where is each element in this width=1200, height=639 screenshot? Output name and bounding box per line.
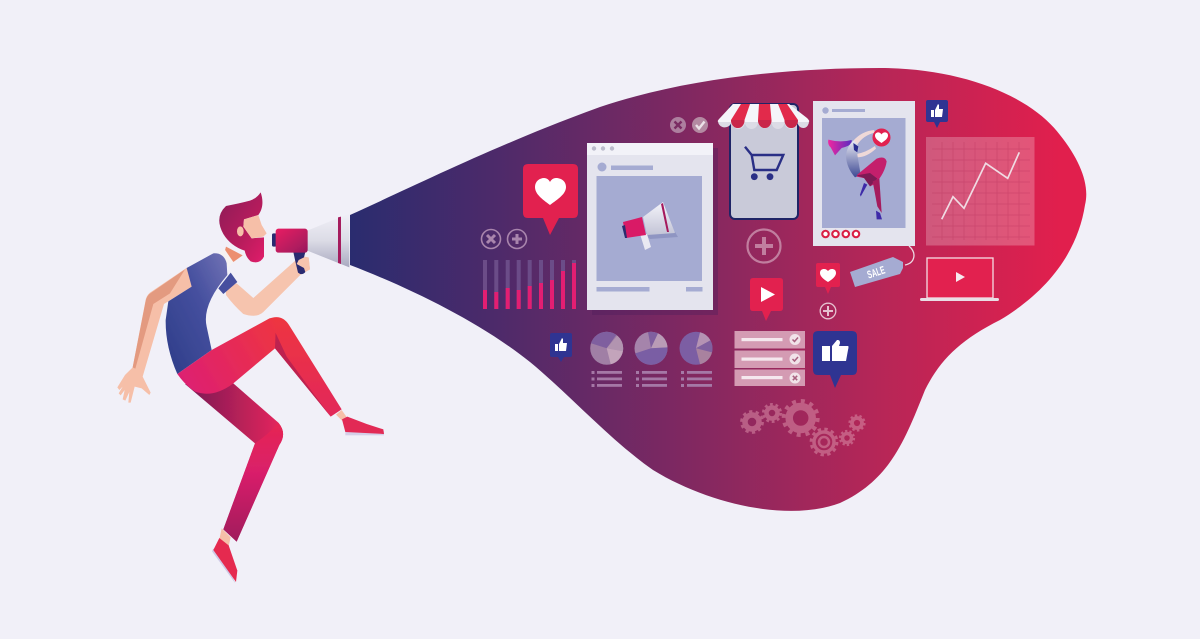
shin shadow (275, 332, 331, 417)
torso (166, 253, 227, 374)
back arm (117, 267, 192, 403)
small plus button (820, 303, 836, 319)
megaphone horn (307, 213, 349, 267)
megaphone hand (294, 256, 310, 273)
raised shin (268, 317, 342, 417)
line chart panel (926, 137, 1034, 246)
checklist rows (734, 331, 805, 386)
cross and plus buttons (482, 230, 526, 248)
megaphone stripe (338, 217, 341, 264)
face (243, 215, 267, 238)
laptop play (920, 258, 999, 301)
lower back leg (185, 383, 283, 542)
pie chart legends (592, 371, 712, 387)
collar (219, 248, 233, 267)
lower shoe (213, 538, 237, 582)
social post card (813, 101, 915, 246)
reject and approve buttons (670, 117, 708, 133)
lower shoe sole (212, 548, 235, 583)
heart badge (872, 128, 890, 146)
browser post card (587, 143, 718, 315)
hair and beard (219, 192, 264, 262)
lower ankle (219, 528, 231, 546)
megaphone mouthpiece (272, 233, 277, 247)
sale tag (850, 246, 914, 287)
dancing figure (828, 130, 887, 219)
speech blob shape (350, 68, 1086, 511)
pelvis and thigh (177, 318, 276, 394)
large thumbs-up bubble (813, 331, 857, 388)
raised ankle (336, 410, 347, 421)
large plus button (748, 230, 780, 262)
reaction hearts (821, 230, 860, 238)
raised shoe sole (345, 431, 384, 435)
heart icon (535, 178, 566, 205)
raised shoe (342, 417, 384, 434)
sleeve (218, 273, 237, 294)
sale tag: SALE (866, 264, 887, 281)
small thumbs-up bubble left (550, 333, 572, 362)
front arm (226, 258, 310, 316)
pie one (590, 332, 623, 365)
pie charts (590, 332, 712, 365)
megaphone body (276, 229, 308, 253)
cart icon (745, 147, 783, 180)
small thumbs-up bubble top (926, 100, 948, 128)
pie three (680, 332, 712, 365)
heart speech bubble (523, 164, 578, 235)
play speech bubble (750, 278, 783, 321)
gears (742, 401, 864, 455)
neck (224, 247, 243, 262)
awning (718, 104, 809, 129)
megaphone handle (293, 252, 305, 274)
equalizer bars (483, 260, 576, 309)
shop phone with awning (718, 104, 809, 219)
ear (237, 226, 244, 236)
character with megaphone (117, 192, 384, 583)
megaphone illustration (622, 202, 678, 250)
small heart bubble (816, 263, 840, 294)
lower leg calf (223, 423, 283, 542)
pie two (634, 332, 668, 365)
